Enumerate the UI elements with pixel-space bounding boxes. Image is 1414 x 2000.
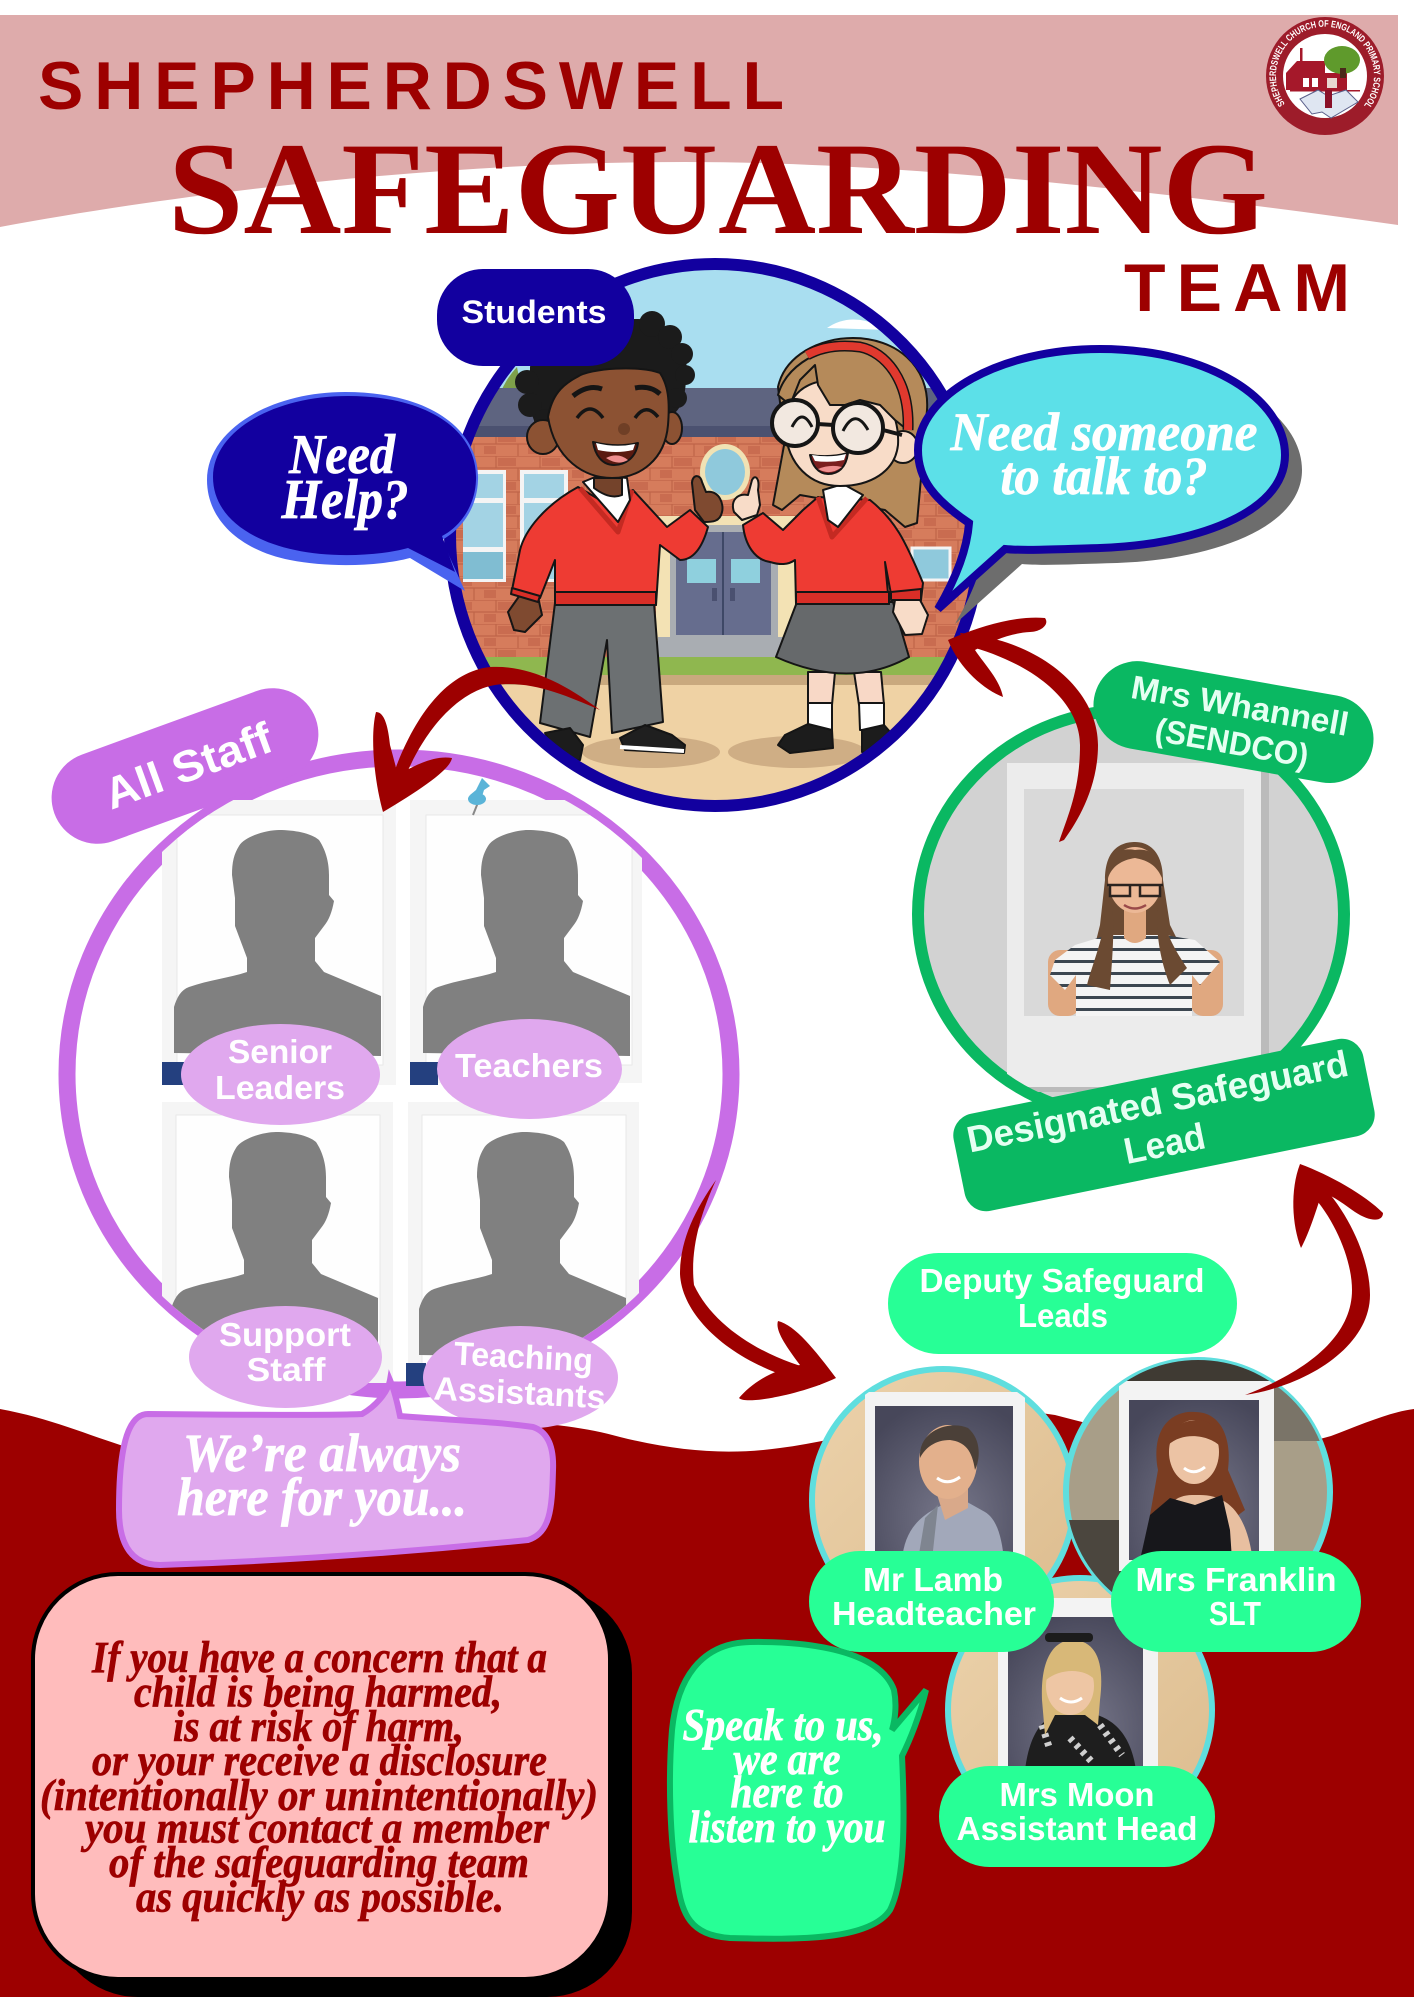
label: senior leaders: Leaders xyxy=(215,1069,345,1106)
label: designated safeguard lead: Lead xyxy=(1120,1115,1209,1172)
photo: Mrs Whannell xyxy=(1048,842,1223,1016)
speech bubble: speak to us: here to xyxy=(730,1766,844,1817)
panel: students illustration xyxy=(440,250,1000,825)
text block: concern message: of the safeguarding team xyxy=(109,1838,529,1887)
speech bubble: need help: Need xyxy=(288,424,396,486)
speech bubble: speak to us xyxy=(670,1642,926,1939)
text block: concern message: or your receive a disclosure xyxy=(92,1736,547,1785)
label: teaching assistants xyxy=(423,1326,618,1429)
speech bubble: speak to us: we are xyxy=(734,1733,840,1784)
speech bubble: speak to us: listen to you xyxy=(688,1801,886,1852)
label: Mrs Moon Assistant Head xyxy=(939,1766,1215,1867)
label: Mrs Whannell (SENDCO): (SENDCO) xyxy=(1152,711,1311,774)
illustration: boy xyxy=(508,311,722,760)
speech bubble: we're always here for you: here for you... xyxy=(177,1467,467,1527)
text block: concern message: (intentionally or unintentionally) xyxy=(40,1771,598,1820)
label: teachers xyxy=(437,1019,622,1119)
label: senior leaders: Senior xyxy=(228,1033,332,1070)
illustration: girl xyxy=(733,338,928,753)
label: Mrs Franklin SLT xyxy=(1111,1551,1361,1652)
photo: Mrs Moon xyxy=(945,1575,1215,1778)
speech bubble: need help: Help? xyxy=(281,469,408,531)
label: deputy safeguard leads: Deputy Safeguard xyxy=(920,1262,1204,1299)
title: SHEPHERDSWELL xyxy=(38,48,784,124)
text block: concern message: is at risk of harm, xyxy=(173,1702,464,1751)
title: TEAM xyxy=(1124,250,1350,326)
arrow: all staff to deputy leads xyxy=(680,1180,836,1400)
panel: all staff circle xyxy=(67,758,731,1390)
label: designated safeguard lead: Designated Safeguard xyxy=(963,1043,1352,1161)
bottom red wave background xyxy=(0,1409,1414,1997)
label: support staff xyxy=(189,1306,382,1408)
speech bubble: need help xyxy=(207,392,478,591)
text block: concern message: you must contact a member xyxy=(80,1804,550,1852)
label: Mrs Moon Assistant Head: Mrs Moon xyxy=(1000,1776,1154,1813)
text block: concern message: child is being harmed, xyxy=(134,1668,502,1716)
label: support staff: Support xyxy=(219,1316,351,1353)
text block: concern message: as quickly as possible. xyxy=(136,1872,504,1922)
icon: push pin xyxy=(468,778,490,815)
speech bubble: we're always here for you: We’re always xyxy=(183,1423,461,1483)
label: Mrs Franklin SLT: SLT xyxy=(1209,1595,1261,1632)
label: Mrs Whannell (SENDCO): Mrs Whannell xyxy=(1128,668,1351,743)
panel: designated safeguard lead circle xyxy=(918,710,1344,1118)
text block: concern message xyxy=(40,1633,598,1922)
label: Mr Lamb Headteacher: Headteacher xyxy=(832,1595,1036,1632)
label: students xyxy=(437,269,634,366)
label: deputy safeguard leads: Leads xyxy=(1018,1297,1108,1334)
arrow: deputy leads to designated lead xyxy=(1245,1164,1383,1395)
card: senior leaders photo xyxy=(162,800,396,1085)
label: designated safeguard lead xyxy=(949,1035,1379,1215)
photo: Mrs Franklin xyxy=(1063,1357,1333,1596)
label: teaching assistants: Assistants xyxy=(433,1370,606,1415)
label: all staff: All Staff xyxy=(98,713,279,819)
label: support staff: Staff xyxy=(246,1351,327,1388)
card: teaching assistants photo xyxy=(406,1102,639,1386)
speech bubble: need someone to talk to: Need someone xyxy=(950,402,1258,462)
label: all staff xyxy=(39,675,331,857)
speech bubble: need someone to talk to xyxy=(918,349,1302,624)
photo: Mr Lamb xyxy=(809,1366,1072,1579)
card: teachers photo xyxy=(410,800,642,1085)
text block: concern message: If you have a concern that a xyxy=(91,1633,547,1682)
title: SAFEGUARDING xyxy=(168,115,1268,262)
card: support staff photo xyxy=(162,1102,393,1383)
panel: concern notice xyxy=(33,1574,632,1997)
label: Mrs Franklin SLT: Mrs Franklin xyxy=(1136,1561,1336,1598)
label: senior leaders xyxy=(181,1024,380,1125)
label: deputy safeguard leads xyxy=(888,1253,1237,1354)
label: Mr Lamb Headteacher xyxy=(809,1551,1054,1652)
label: Mrs Moon Assistant Head: Assistant Head xyxy=(956,1810,1198,1847)
arrow: students to all staff xyxy=(373,667,600,812)
label: Mrs Whannell (SENDCO) xyxy=(1087,654,1380,790)
label: Mr Lamb Headteacher: Mr Lamb xyxy=(863,1561,1003,1598)
header banner xyxy=(0,15,1398,227)
icon: school logo: SHEPHERDSWELL CHURCH OF ENGLAND PRIMARY SCHOOL xyxy=(1269,20,1381,107)
arrow: designated lead to students xyxy=(948,618,1098,842)
label: students: Students xyxy=(462,294,606,330)
speech bubble: we're always here for you xyxy=(119,1380,553,1565)
title xyxy=(38,48,1350,326)
label: teachers: Teachers xyxy=(455,1047,603,1084)
label: teaching assistants: Teaching xyxy=(453,1335,594,1379)
speech bubble: speak to us: Speak to us, xyxy=(682,1699,884,1750)
speech bubble: need someone to talk to: to talk to? xyxy=(1000,446,1208,506)
